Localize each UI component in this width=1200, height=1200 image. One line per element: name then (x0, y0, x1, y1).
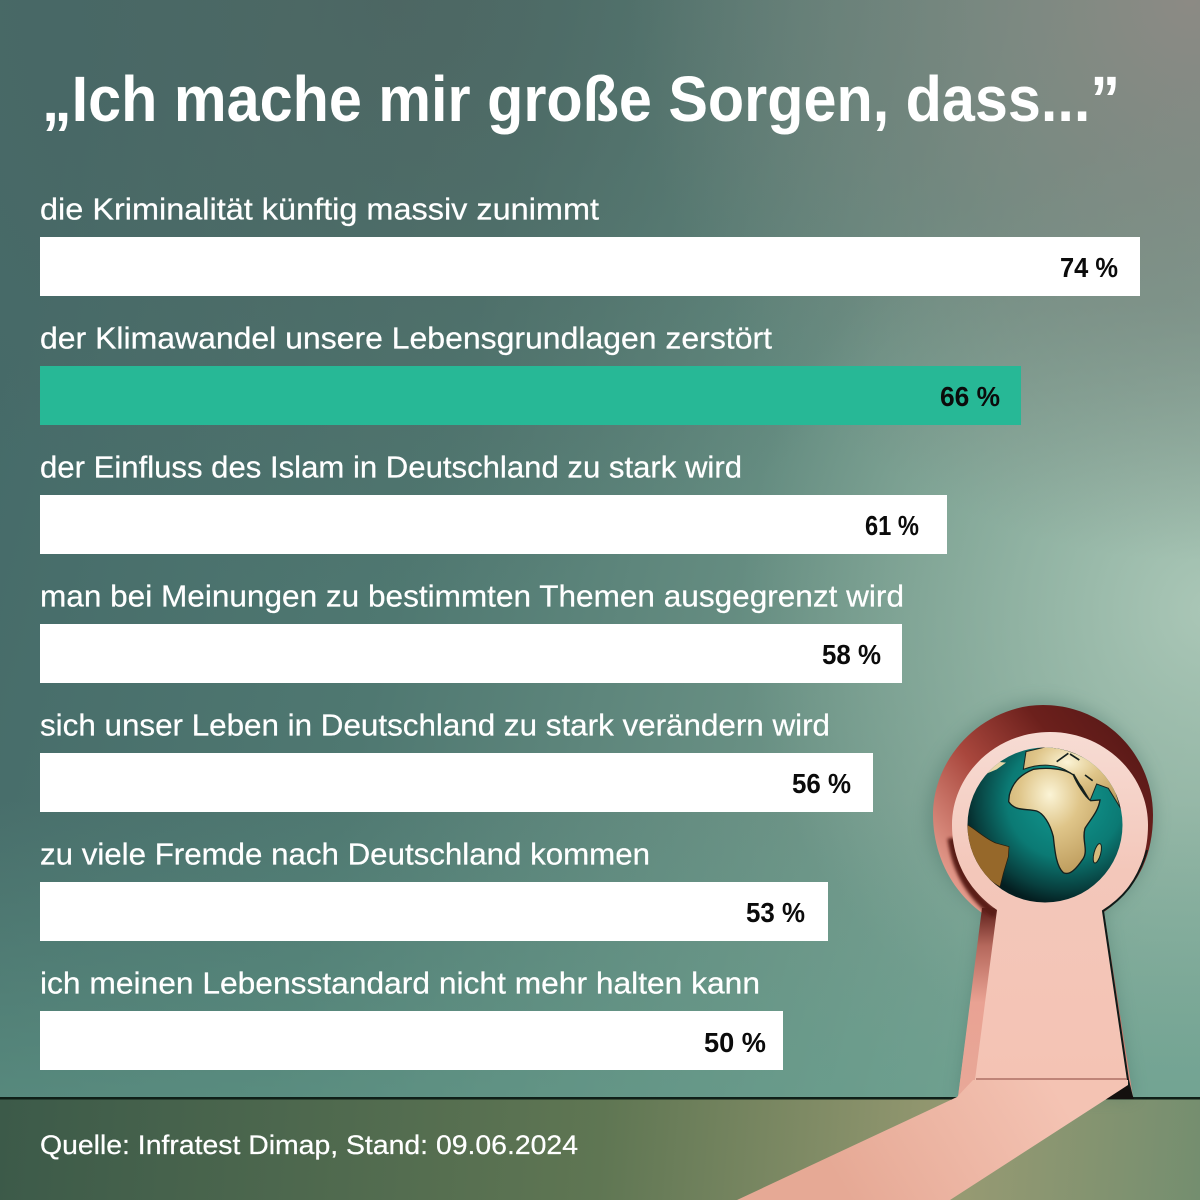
label: der Klimawandel unsere Lebensgrundlagen zerstört (40, 320, 772, 356)
label: man bei Meinungen zu bestimmten Themen ausgegrenzt wird (40, 578, 904, 614)
bar (40, 1011, 783, 1070)
keyhole opening (933, 705, 1153, 1097)
bar (40, 237, 1140, 296)
dark gap at floor (1100, 1084, 1134, 1099)
title: „Ich mache mir große Sorgen, dass...” (42, 63, 1120, 135)
row 4 (40, 578, 904, 683)
value: 74 % (1060, 252, 1118, 283)
label: die Kriminalität künftig massiv zunimmt (40, 192, 599, 226)
row 2 (40, 320, 1021, 425)
label: sich unser Leben in Deutschland zu stark verändern wird (40, 708, 830, 742)
source: Quelle: Infratest Dimap, Stand: 09.06.2024 (40, 1130, 578, 1160)
label: der Einfluss des Islam in Deutschland zu stark wird (40, 450, 742, 484)
row 1 (40, 192, 1140, 296)
sea detail (1057, 753, 1093, 797)
row 6 (40, 836, 828, 941)
bar (40, 624, 902, 683)
keyhole shadow (927, 700, 1155, 1097)
label: zu viele Fremde nach Deutschland kommen (40, 836, 650, 872)
south america (967, 825, 1009, 887)
left neck sliver (958, 908, 999, 1097)
greenland (988, 762, 1006, 774)
value: 56 % (792, 768, 851, 799)
row 3 (40, 450, 947, 554)
row 5 (40, 708, 873, 812)
value: 53 % (746, 897, 805, 928)
pink light shape (952, 732, 1148, 1080)
highlighted bar (40, 366, 1021, 425)
value: 58 % (822, 639, 881, 670)
bar (40, 753, 873, 812)
bar (40, 882, 828, 941)
floor light beam (737, 1080, 1128, 1200)
row 7 (40, 966, 783, 1070)
africa (1009, 768, 1100, 873)
bar (40, 495, 947, 554)
value: 66 % (940, 381, 1000, 412)
keyhole illustration (737, 700, 1155, 1200)
label: ich meinen Lebensstandard nicht mehr halten kann (40, 966, 760, 1000)
beam crease (976, 1078, 1127, 1080)
value: 61 % (865, 510, 919, 541)
floor (0, 1097, 1200, 1200)
lower left rim shadow (952, 838, 996, 914)
value: 50 % (704, 1027, 766, 1058)
globe (968, 748, 1122, 902)
right keyhole edge (1103, 850, 1147, 1097)
madagascar (1092, 843, 1102, 864)
europe and asia (1023, 747, 1121, 808)
